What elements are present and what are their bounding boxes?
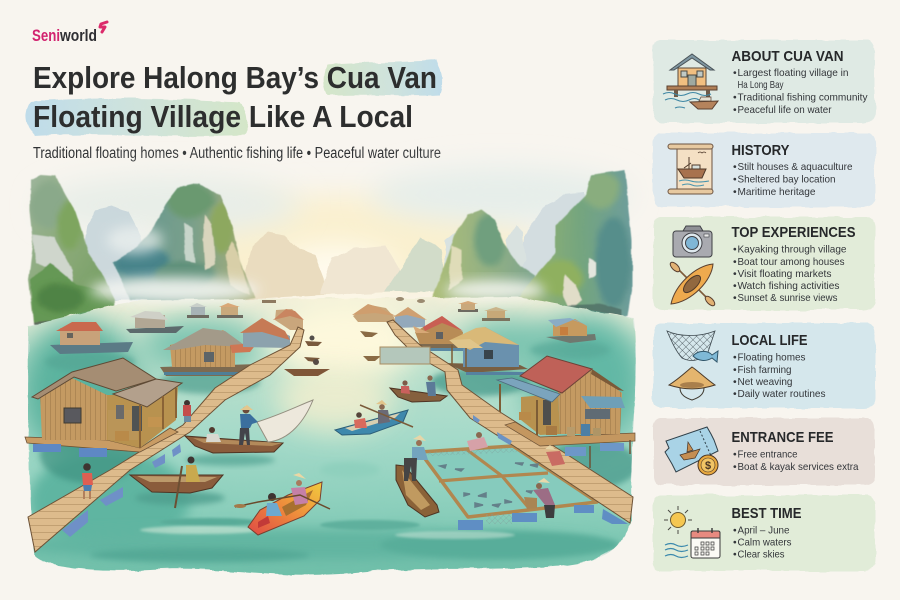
- text: best time list: •: [733, 538, 737, 548]
- panel: local life: [653, 323, 875, 408]
- kayak with two paddlers: [234, 473, 330, 535]
- text: local life list: •: [733, 377, 737, 388]
- text: history list: Stilt houses & aquaculture: [738, 162, 853, 173]
- text: local life list: [733, 353, 826, 400]
- heading: local life: LOCAL LIFE: [732, 333, 808, 349]
- boat and standing man by fish pen: [396, 435, 439, 517]
- title with watercolor highlights: Explore Halong Bay’s Cua Van: [33, 60, 437, 95]
- fish farmers: [467, 432, 565, 518]
- heading: entrance fee: ENTRANCE FEE: [732, 430, 834, 446]
- text: local life list: •: [733, 365, 737, 376]
- text: best time list: Clear skies: [738, 550, 784, 560]
- icon: waves: [665, 544, 688, 558]
- water: [0, 297, 645, 575]
- text: history list: •: [733, 162, 737, 173]
- text: best time list: •: [733, 525, 737, 536]
- text: local life list: •: [733, 353, 737, 364]
- icon: camera: [673, 226, 712, 257]
- text: history list: Maritime heritage: [738, 187, 816, 198]
- boat: fisherman casting net: [185, 400, 313, 453]
- text: history list: Sheltered bay location: [738, 174, 836, 186]
- small rowing boats in the distance: [284, 331, 430, 376]
- boat: blue with two people: [335, 400, 413, 435]
- text: local life list: •: [733, 389, 737, 400]
- text: about cua van list: •: [733, 92, 737, 104]
- boat: two people near pier: [390, 375, 447, 402]
- text: top experiences list: •: [733, 293, 737, 304]
- distant mountains: [75, 193, 590, 300]
- text: history list: [733, 162, 853, 198]
- text: entrance fee list: •: [733, 462, 737, 473]
- text: about cua van list: •: [733, 68, 737, 79]
- text: entrance fee list: Free entrance: [738, 450, 798, 461]
- morning fog: [90, 226, 545, 303]
- sky: [40, 167, 630, 295]
- text: best time list: [733, 525, 792, 560]
- text: best time list: April – June: [738, 525, 790, 536]
- text: top experiences list: Kayaking through village: [738, 245, 847, 256]
- boat: rower: [130, 456, 223, 508]
- heading: about cua van: ABOUT CUA VAN: [732, 49, 844, 65]
- house: center large: [160, 328, 260, 376]
- distant small houses: [187, 297, 510, 321]
- text: entrance fee list: [733, 450, 859, 473]
- mountain: right center: [432, 210, 535, 298]
- mountain: far left: [28, 175, 115, 325]
- panel: about cua van: [653, 40, 875, 123]
- icon: conical hat: [669, 367, 715, 400]
- house: far right blue roof: [546, 318, 596, 343]
- icon: ticket and coin: [665, 427, 718, 475]
- house: blue wall yellow roof: [445, 327, 528, 375]
- house: big left: [25, 358, 182, 457]
- subtitle: Traditional floating homes • Authentic fishing life • Peaceful water culture: [33, 145, 441, 162]
- text: history list: •: [733, 187, 737, 198]
- panel: top experiences: [653, 217, 875, 310]
- logo: Seniworld: Seni: [32, 26, 60, 45]
- illustration: floating village scene: [0, 167, 645, 575]
- text: top experiences list: Watch fishing activities: [738, 281, 840, 292]
- icon: stilt house and boat: [663, 54, 718, 109]
- mountain: center left: [113, 182, 255, 302]
- house: right cluster: [352, 304, 467, 351]
- icon: sun: [664, 506, 692, 534]
- text: local life list: Net weaving: [738, 377, 793, 388]
- person on boardwalk: [82, 400, 191, 499]
- text: about cua van list: [733, 68, 868, 116]
- text: local life list: Fish farming: [738, 365, 792, 376]
- panel: best time: [653, 495, 875, 571]
- left boardwalk: [28, 327, 304, 552]
- icon: fishing net with fish: [667, 331, 718, 362]
- text: local life list: Daily water routines: [738, 389, 826, 400]
- text: about cua van list: •: [733, 105, 737, 116]
- text: top experiences list: •: [733, 269, 737, 280]
- mountain: far right: [518, 170, 632, 318]
- text: top experiences list: Visit floating markets: [738, 269, 832, 280]
- text: entrance fee list: •: [733, 450, 737, 461]
- logo: Seniworld: [32, 22, 107, 45]
- house: grey roof small: [126, 311, 184, 333]
- text: about cua van list: Traditional fishing community: [738, 92, 868, 104]
- text: top experiences list: Sunset & sunrise views: [738, 293, 838, 304]
- fish pen: [420, 446, 597, 530]
- icon: ticket and coin: $: [705, 460, 711, 472]
- text: top experiences list: •: [733, 257, 737, 268]
- house: left red roof: [50, 322, 133, 354]
- heading: best time: BEST TIME: [732, 506, 802, 522]
- text: entrance fee list: Boat & kayak services extra: [738, 462, 859, 473]
- house: blue wall orange roof: [240, 309, 304, 348]
- text: top experiences list: •: [733, 245, 737, 256]
- text: history list: •: [733, 174, 737, 186]
- text: about cua van list: Peaceful life on water: [738, 105, 832, 116]
- icon: calendar: [691, 528, 720, 558]
- title with watercolor highlights: Floating Village Like A Local: [33, 99, 413, 134]
- text: top experiences list: •: [733, 281, 737, 292]
- icon: kayak and paddle: [669, 261, 716, 307]
- right boardwalk: [387, 320, 633, 524]
- text: about cua van list: Ha Long Bay: [738, 80, 784, 91]
- title with watercolor highlights: [26, 60, 443, 136]
- text: top experiences list: [733, 245, 847, 304]
- text: about cua van list: Largest floating village in: [738, 68, 849, 79]
- logo: Seniworld: world: [59, 26, 97, 45]
- text: local life list: Floating homes: [738, 353, 806, 364]
- icon: scroll with boat: [668, 144, 713, 194]
- heading: history: HISTORY: [732, 143, 790, 159]
- house: big right red roof: [497, 356, 635, 468]
- panel: entrance fee: [653, 418, 875, 485]
- text: best time list: •: [733, 550, 737, 560]
- text: best time list: Calm waters: [738, 538, 792, 548]
- panel: history: [653, 133, 875, 207]
- heading: top experiences: TOP EXPERIENCES: [732, 225, 856, 241]
- text: top experiences list: Boat tour among houses: [738, 257, 844, 268]
